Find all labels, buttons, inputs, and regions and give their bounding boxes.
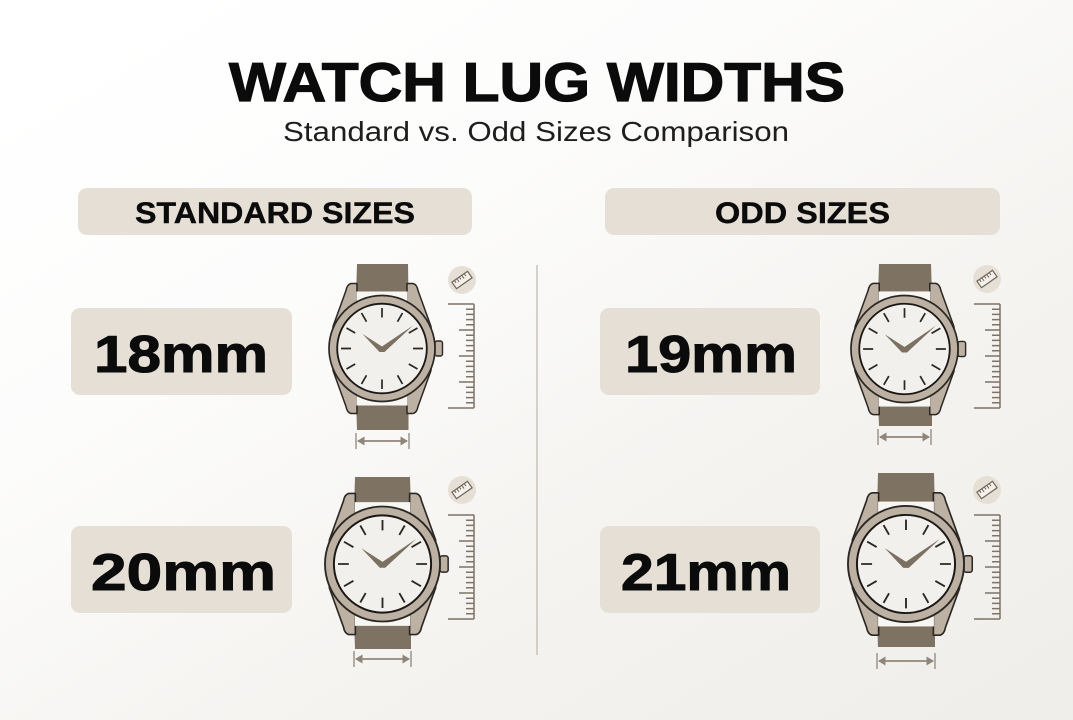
ruler: 19mm [974,304,1000,408]
size label: 18mm [71,308,292,395]
size label: 21mm: 21mm [621,544,791,602]
ruler icon: 19mm [973,265,1001,293]
width arrow: 20mm [354,651,411,667]
size label: 19mm: 19mm [625,326,797,384]
width arrow: 21mm [877,653,935,669]
panel: standard sizes [71,188,476,667]
heading: standard sizes: STANDARD SIZES [135,197,415,230]
column divider [536,265,538,655]
ruler icon: 20mm [448,476,476,504]
ruler: 21mm [974,515,1000,619]
size label: 21mm [600,526,820,613]
panel: odd sizes [600,188,1001,669]
watch: 20mm [325,477,448,649]
size label: 20mm: 20mm [91,544,276,602]
subtitle: Standard vs. Odd Sizes Comparison [283,116,789,147]
width arrow: 19mm [878,429,931,445]
heading: standard sizes [78,188,472,235]
size label: 18mm: 18mm [94,326,268,384]
watch: 19mm [851,264,966,426]
watch: 18mm [329,264,442,430]
ruler: 20mm [448,515,474,619]
heading: odd sizes [605,188,1000,235]
width arrow: 18mm [356,433,409,449]
ruler icon: 18mm [448,266,476,294]
heading: odd sizes: ODD SIZES [715,197,890,230]
size label: 20mm [71,526,292,613]
watch: 21mm [848,473,972,647]
size label: 19mm [600,308,820,395]
title: WATCH LUG WIDTHS [229,51,845,113]
ruler: 18mm [448,304,474,408]
ruler icon: 21mm [973,476,1001,504]
